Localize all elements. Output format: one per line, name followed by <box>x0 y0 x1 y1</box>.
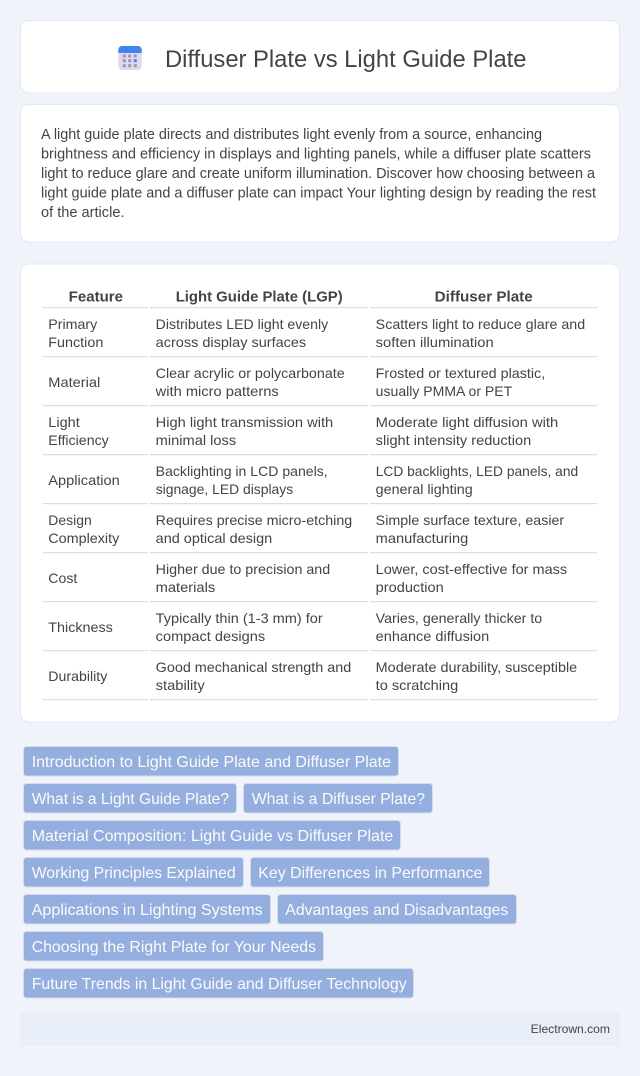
tag: material composition: Material Composition: Light Guide vs Diffuser Plate <box>32 828 393 845</box>
row: light efficiency: High light transmission with <box>156 414 333 430</box>
row: thickness: Typically thin (1-3 mm) for <box>156 610 323 626</box>
row: durability: Good mechanical strength and <box>156 659 351 675</box>
row: application <box>48 463 578 497</box>
tag: choosing the right plate <box>24 932 324 961</box>
row: thickness <box>48 610 542 644</box>
tag: introduction <box>24 746 398 776</box>
row: light efficiency: minimal loss <box>156 432 236 448</box>
panel: comparison table <box>20 264 620 722</box>
row: primary function: Scatters light to reduce glare and <box>376 316 585 332</box>
row: light efficiency: Efficiency <box>48 432 109 448</box>
row: material <box>48 365 545 399</box>
row: light efficiency: Moderate light diffusion with <box>376 414 558 430</box>
tag: advantages: Advantages and Disadvantages <box>285 902 508 919</box>
row: light efficiency <box>48 414 558 448</box>
row: primary function: Primary <box>48 316 97 332</box>
row: primary function: soften illumination <box>376 334 494 350</box>
row: application: signage, LED displays <box>156 481 293 497</box>
table header row: Feature <box>69 288 123 306</box>
intro text block: brightness and efficiency in displays and lighting panels, while a diffuser plate scatters <box>41 146 591 162</box>
row: light efficiency: slight intensity reduction <box>376 432 531 448</box>
table of contents tags <box>24 746 516 998</box>
tag: what is a diffuser plate <box>244 784 432 813</box>
row: cost: Higher due to precision and <box>156 561 330 577</box>
row: design complexity: Complexity <box>48 530 119 546</box>
icon: calendar <box>118 46 142 70</box>
row: primary function <box>48 316 585 350</box>
row: application: Backlighting in LCD panels, <box>156 463 328 479</box>
footer: Electrown.com <box>531 1022 610 1036</box>
row: application: general lighting <box>376 481 473 497</box>
tag: applications <box>24 894 270 924</box>
tag: what is a diffuser plate: What is a Diffuser Plate? <box>252 791 425 808</box>
panel: introduction <box>20 104 620 242</box>
row: primary function: Function <box>48 334 103 350</box>
row: design complexity: manufacturing <box>376 530 468 546</box>
row: cost: Cost <box>48 570 77 586</box>
row: design complexity: Simple surface texture, easier <box>376 512 565 528</box>
row: thickness: compact designs <box>156 628 265 644</box>
row: cost: materials <box>156 579 215 595</box>
title: Diffuser Plate vs Light Guide Plate <box>165 46 526 73</box>
tag: future trends <box>24 968 414 998</box>
row: material: Clear acrylic or polycarbonate <box>156 365 345 381</box>
row: application: LCD backlights, LED panels, and <box>376 463 578 479</box>
intro text block: of the article. <box>41 205 124 221</box>
table header row: Diffuser Plate <box>435 288 533 306</box>
table header row <box>69 288 533 306</box>
tag: introduction: Introduction to Light Guide Plate and Diffuser Plate <box>32 754 391 771</box>
row: material: Frosted or textured plastic, <box>376 365 545 381</box>
row: thickness: enhance diffusion <box>376 628 489 644</box>
row: primary function: Distributes LED light evenly <box>156 316 328 332</box>
intro text block: A light guide plate directs and distributes light evenly from a source, enhancing <box>41 127 542 143</box>
row: design complexity <box>48 512 565 546</box>
row: primary function: across display surfaces <box>156 334 306 350</box>
panel: title header <box>20 20 620 93</box>
intro text block <box>41 127 596 221</box>
row: design complexity: and optical design <box>156 530 272 546</box>
tag: future trends: Future Trends in Light Guide and Diffuser Technology <box>32 976 407 993</box>
tag: applications: Applications in Lighting Systems <box>32 902 263 919</box>
row: light efficiency: Light <box>48 414 80 430</box>
row: cost: Lower, cost-effective for mass <box>376 561 567 577</box>
tag: working principles <box>24 858 244 887</box>
row: durability: to scratching <box>376 677 458 693</box>
row: durability: Durability <box>48 668 107 684</box>
tag: what is a light guide plate: What is a Light Guide Plate? <box>32 791 229 808</box>
intro text block: light guide plate and a diffuser plate can impact Your lighting design by reading the rest <box>41 186 596 202</box>
row: thickness: Thickness <box>48 619 113 635</box>
tag: working principles: Working Principles Explained <box>32 865 236 882</box>
tag: choosing the right plate: Choosing the Right Plate for Your Needs <box>32 939 316 956</box>
tag: key differences <box>250 858 490 887</box>
intro text block: light to reduce glare and create uniform illumination. Discover how choosing between a <box>41 166 595 182</box>
tag: material composition <box>24 820 400 850</box>
row: application: Application <box>48 472 120 488</box>
row: durability <box>48 659 577 693</box>
tag: what is a light guide plate <box>24 784 236 813</box>
row: material: with micro patterns <box>155 383 279 399</box>
row: design complexity: Requires precise micro-etching <box>156 512 352 528</box>
tag: key differences: Key Differences in Performance <box>258 865 482 882</box>
row: material: usually PMMA or PET <box>376 383 513 399</box>
row: design complexity: Design <box>48 512 92 528</box>
row: durability: stability <box>156 677 205 693</box>
row: durability: Moderate durability, susceptible <box>376 659 577 675</box>
row: cost: production <box>376 579 444 595</box>
footer <box>20 1012 620 1046</box>
row: cost <box>48 561 567 595</box>
row: thickness: Varies, generally thicker to <box>376 610 542 626</box>
table header row: Light Guide Plate (LGP) <box>176 288 343 306</box>
tag: advantages <box>278 894 516 924</box>
row: material: Material <box>48 374 100 390</box>
